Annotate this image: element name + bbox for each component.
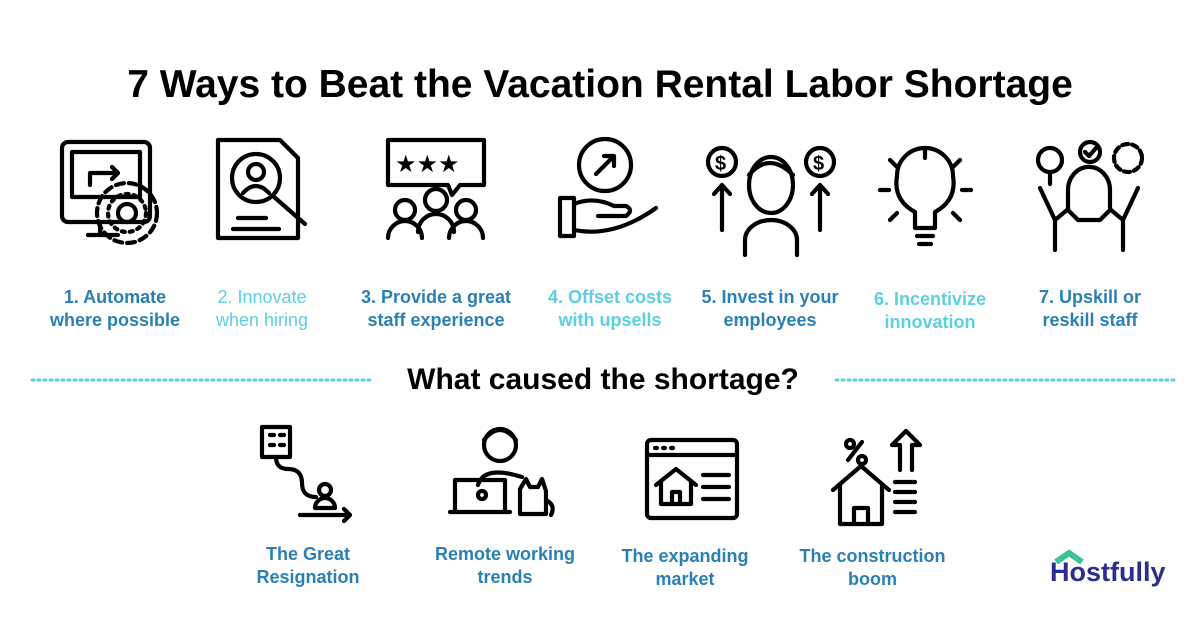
cause 4 label: [799, 546, 946, 589]
label 1: where possible: [50, 310, 180, 330]
label 4: with upsells: [558, 310, 662, 330]
cause 1 label: The Great: [266, 544, 350, 564]
cause 4 label: The construction: [799, 546, 946, 566]
label 5: 5. Invest in your: [701, 287, 839, 307]
icon: upsells: [560, 139, 656, 236]
icon: automate: [62, 142, 157, 243]
cause 3 label: [621, 546, 748, 589]
cause 3 label: The expanding: [621, 546, 748, 566]
cause 3 label: market: [655, 569, 715, 589]
label 2: [216, 287, 308, 330]
icon: construction: [833, 431, 920, 524]
label 4: 4. Offset costs: [548, 287, 672, 307]
decorative dots: [32, 378, 1175, 382]
label 5: [701, 287, 839, 330]
title: 7 Ways to Beat the Vacation Rental Labor Shortage: [127, 63, 1073, 106]
icon: upskill: [1038, 142, 1142, 250]
label 3: 3. Provide a great: [361, 287, 511, 307]
cause 1 label: Resignation: [256, 567, 360, 587]
label 7: reskill staff: [1042, 310, 1138, 330]
icon: invest: $: [813, 153, 824, 175]
label 2: 2. Innovate: [217, 287, 307, 307]
icon: staff experience: [388, 140, 484, 238]
icon: remote: [450, 429, 553, 515]
label 4: [548, 287, 672, 330]
icon: great resignation: [262, 427, 350, 521]
label 3: staff experience: [367, 310, 505, 330]
cause 1 label: [256, 544, 360, 587]
cause 4 label: boom: [848, 569, 897, 589]
icon: staff experience: ★★★: [395, 151, 460, 178]
cause 2 label: Remote working: [435, 544, 575, 564]
label 2: when hiring: [216, 310, 308, 330]
subheading: What caused the shortage?: [407, 363, 799, 396]
label 3: [361, 287, 511, 330]
icon: idea: [880, 148, 971, 244]
label 7: 7. Upskill or: [1039, 287, 1141, 307]
label 1: [50, 287, 180, 330]
label 6: innovation: [884, 312, 976, 332]
icon: hiring: [218, 140, 305, 238]
label 7: [1039, 287, 1141, 330]
icon: invest: [708, 148, 834, 255]
logo: Hostfully: [1050, 557, 1166, 587]
label 6: [874, 289, 986, 332]
label 6: 6. Incentivize: [874, 289, 986, 309]
cause 2 label: trends: [477, 567, 532, 587]
label 5: employees: [723, 310, 817, 330]
cause 2 label: [435, 544, 575, 587]
icon: invest: $: [715, 153, 726, 175]
label 1: 1. Automate: [64, 287, 166, 307]
icon: expanding market: [647, 440, 737, 518]
